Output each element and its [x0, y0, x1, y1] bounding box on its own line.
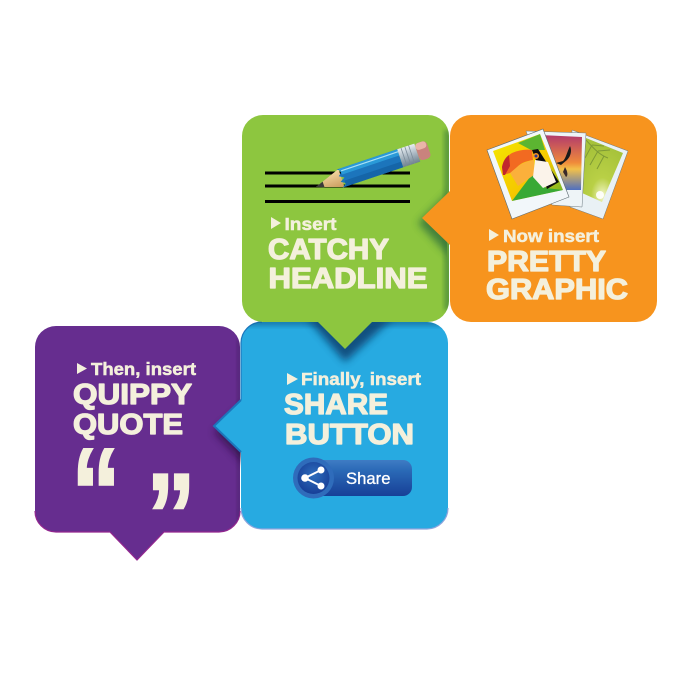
label: share: Share	[346, 469, 390, 488]
icon: small arrow	[489, 229, 499, 241]
icon: pencil	[313, 140, 432, 196]
icon: small arrow	[77, 363, 87, 374]
panel: purple quippy quote	[34, 326, 241, 561]
photo: bamboo	[570, 130, 628, 219]
photo: sunset	[526, 131, 586, 207]
photos	[487, 129, 628, 219]
icon: small arrow	[287, 373, 298, 385]
photo: toucan	[487, 129, 569, 219]
heading: catchy: CATCHY	[268, 234, 389, 266]
icon: share glyph	[301, 466, 324, 490]
heading: quote: QUOTE	[73, 409, 183, 441]
label: then insert: Then, insert	[91, 359, 196, 379]
heading: pretty: PRETTY	[487, 246, 606, 278]
label: now insert: Now insert	[503, 226, 599, 246]
label: finally insert: Finally, insert	[301, 369, 421, 389]
icon: opening quote mark: “	[71, 422, 121, 565]
heading: graphic: GRAPHIC	[486, 274, 628, 306]
icon: closing quote mark: ”	[146, 448, 196, 584]
panel: green catchy headline	[242, 115, 452, 349]
label: insert: Insert	[284, 214, 337, 234]
panel: orange pretty graphic	[422, 115, 657, 322]
heading: quippy: QUIPPY	[73, 379, 192, 411]
heading: button: BUTTON	[285, 419, 414, 451]
writing lines	[265, 172, 410, 203]
icon: small arrow	[271, 217, 281, 229]
panel: blue share button	[214, 316, 448, 529]
heading: headline: HEADLINE	[268, 263, 428, 295]
share button	[293, 458, 412, 498]
heading: share: SHARE	[284, 389, 388, 421]
